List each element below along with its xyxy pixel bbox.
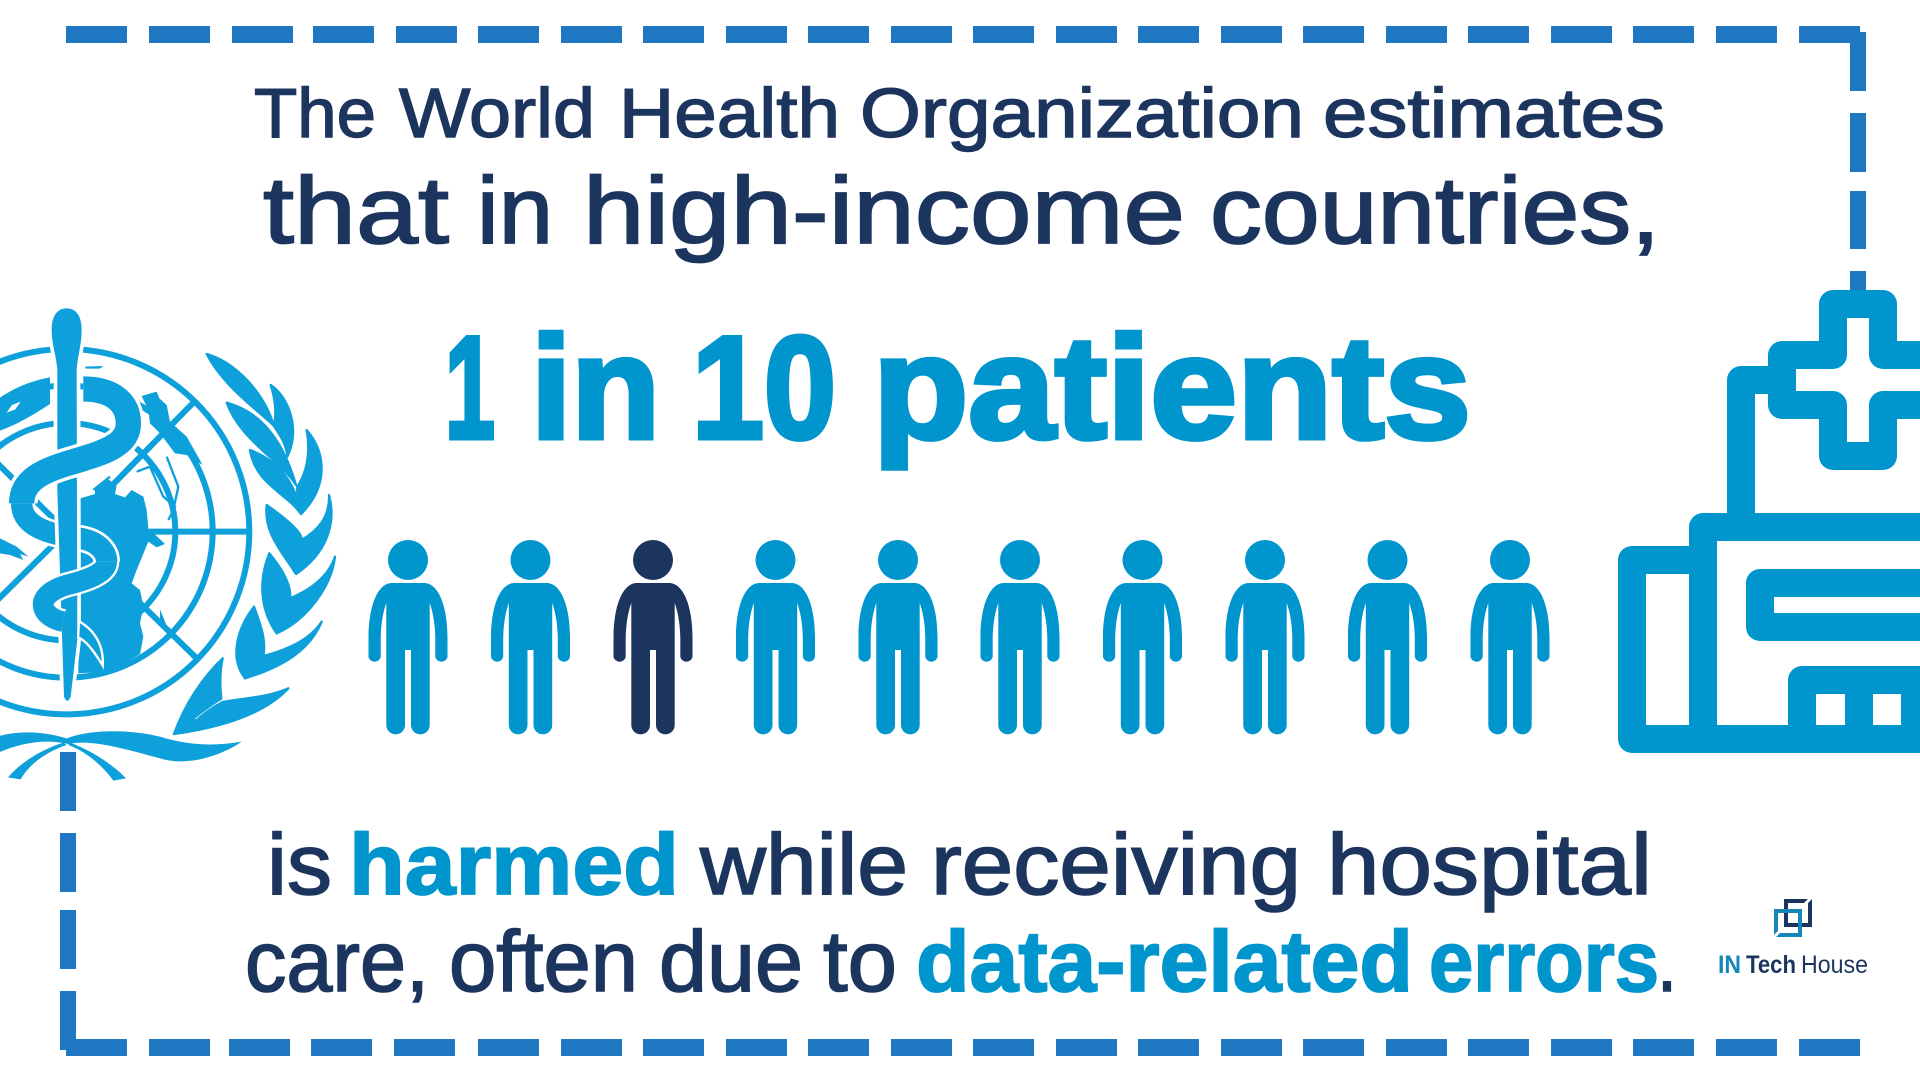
- heading: two intro lines: that: [263, 158, 449, 264]
- continents: [0, 392, 203, 673]
- laurel wreath: [174, 354, 335, 734]
- heading: two intro lines: countries,: [1210, 158, 1660, 264]
- serpent front section: [22, 389, 128, 503]
- heading: two intro lines: Organization: [860, 74, 1304, 152]
- closing statement: to: [823, 914, 897, 1010]
- icon: hospital building: [1632, 304, 1920, 739]
- heading: two intro lines: estimates: [1323, 74, 1665, 152]
- big statistic: 1 in 10 patients: [445, 306, 1471, 469]
- heading: two intro lines: high-income: [583, 158, 1185, 264]
- row of ten people icons, one dark: [368, 540, 1550, 734]
- serpent back section: [22, 503, 107, 562]
- heading: two intro lines: [254, 74, 1665, 264]
- brand logo: IN Tech House: Tech: [1746, 951, 1796, 979]
- closing statement: care,: [245, 914, 429, 1010]
- heading: two intro lines: The: [254, 74, 376, 152]
- closing statement: errors: [1429, 914, 1659, 1010]
- closing statement: .: [1657, 914, 1677, 1010]
- brand logo: IN Tech House: [1718, 895, 1868, 979]
- big statistic: 1 in 10 patients: in: [531, 306, 660, 469]
- closing statement: receiving: [931, 817, 1301, 913]
- closing statement: is: [267, 817, 332, 913]
- heading: two intro lines: World: [399, 74, 595, 152]
- closing statement: data-related: [916, 914, 1413, 1010]
- big statistic: 1 in 10 patients: patients: [873, 306, 1471, 469]
- closing statement: [245, 817, 1677, 1010]
- closing statement: hospital: [1327, 817, 1652, 913]
- heading: two intro lines: Health: [619, 74, 840, 152]
- heading: two intro lines: in: [477, 158, 553, 264]
- closing statement: due: [659, 914, 803, 1010]
- closing statement: often: [449, 914, 638, 1010]
- staff of Asclepius: [52, 308, 82, 701]
- closing statement: harmed: [349, 817, 679, 913]
- brand logo: IN Tech House: House: [1801, 951, 1868, 979]
- dashed frame: left and bottom edges: [60, 752, 1860, 1056]
- closing statement: while: [699, 817, 908, 913]
- dashed frame: top and right edges: [66, 26, 1866, 295]
- WHO emblem: [0, 308, 335, 781]
- brand logo: IN Tech House: IN: [1718, 951, 1741, 979]
- big statistic: 1 in 10 patients: 1: [445, 306, 495, 469]
- ribbon: [0, 731, 242, 761]
- big statistic: 1 in 10 patients: 10: [692, 306, 836, 469]
- globe rings and grid: [0, 349, 249, 714]
